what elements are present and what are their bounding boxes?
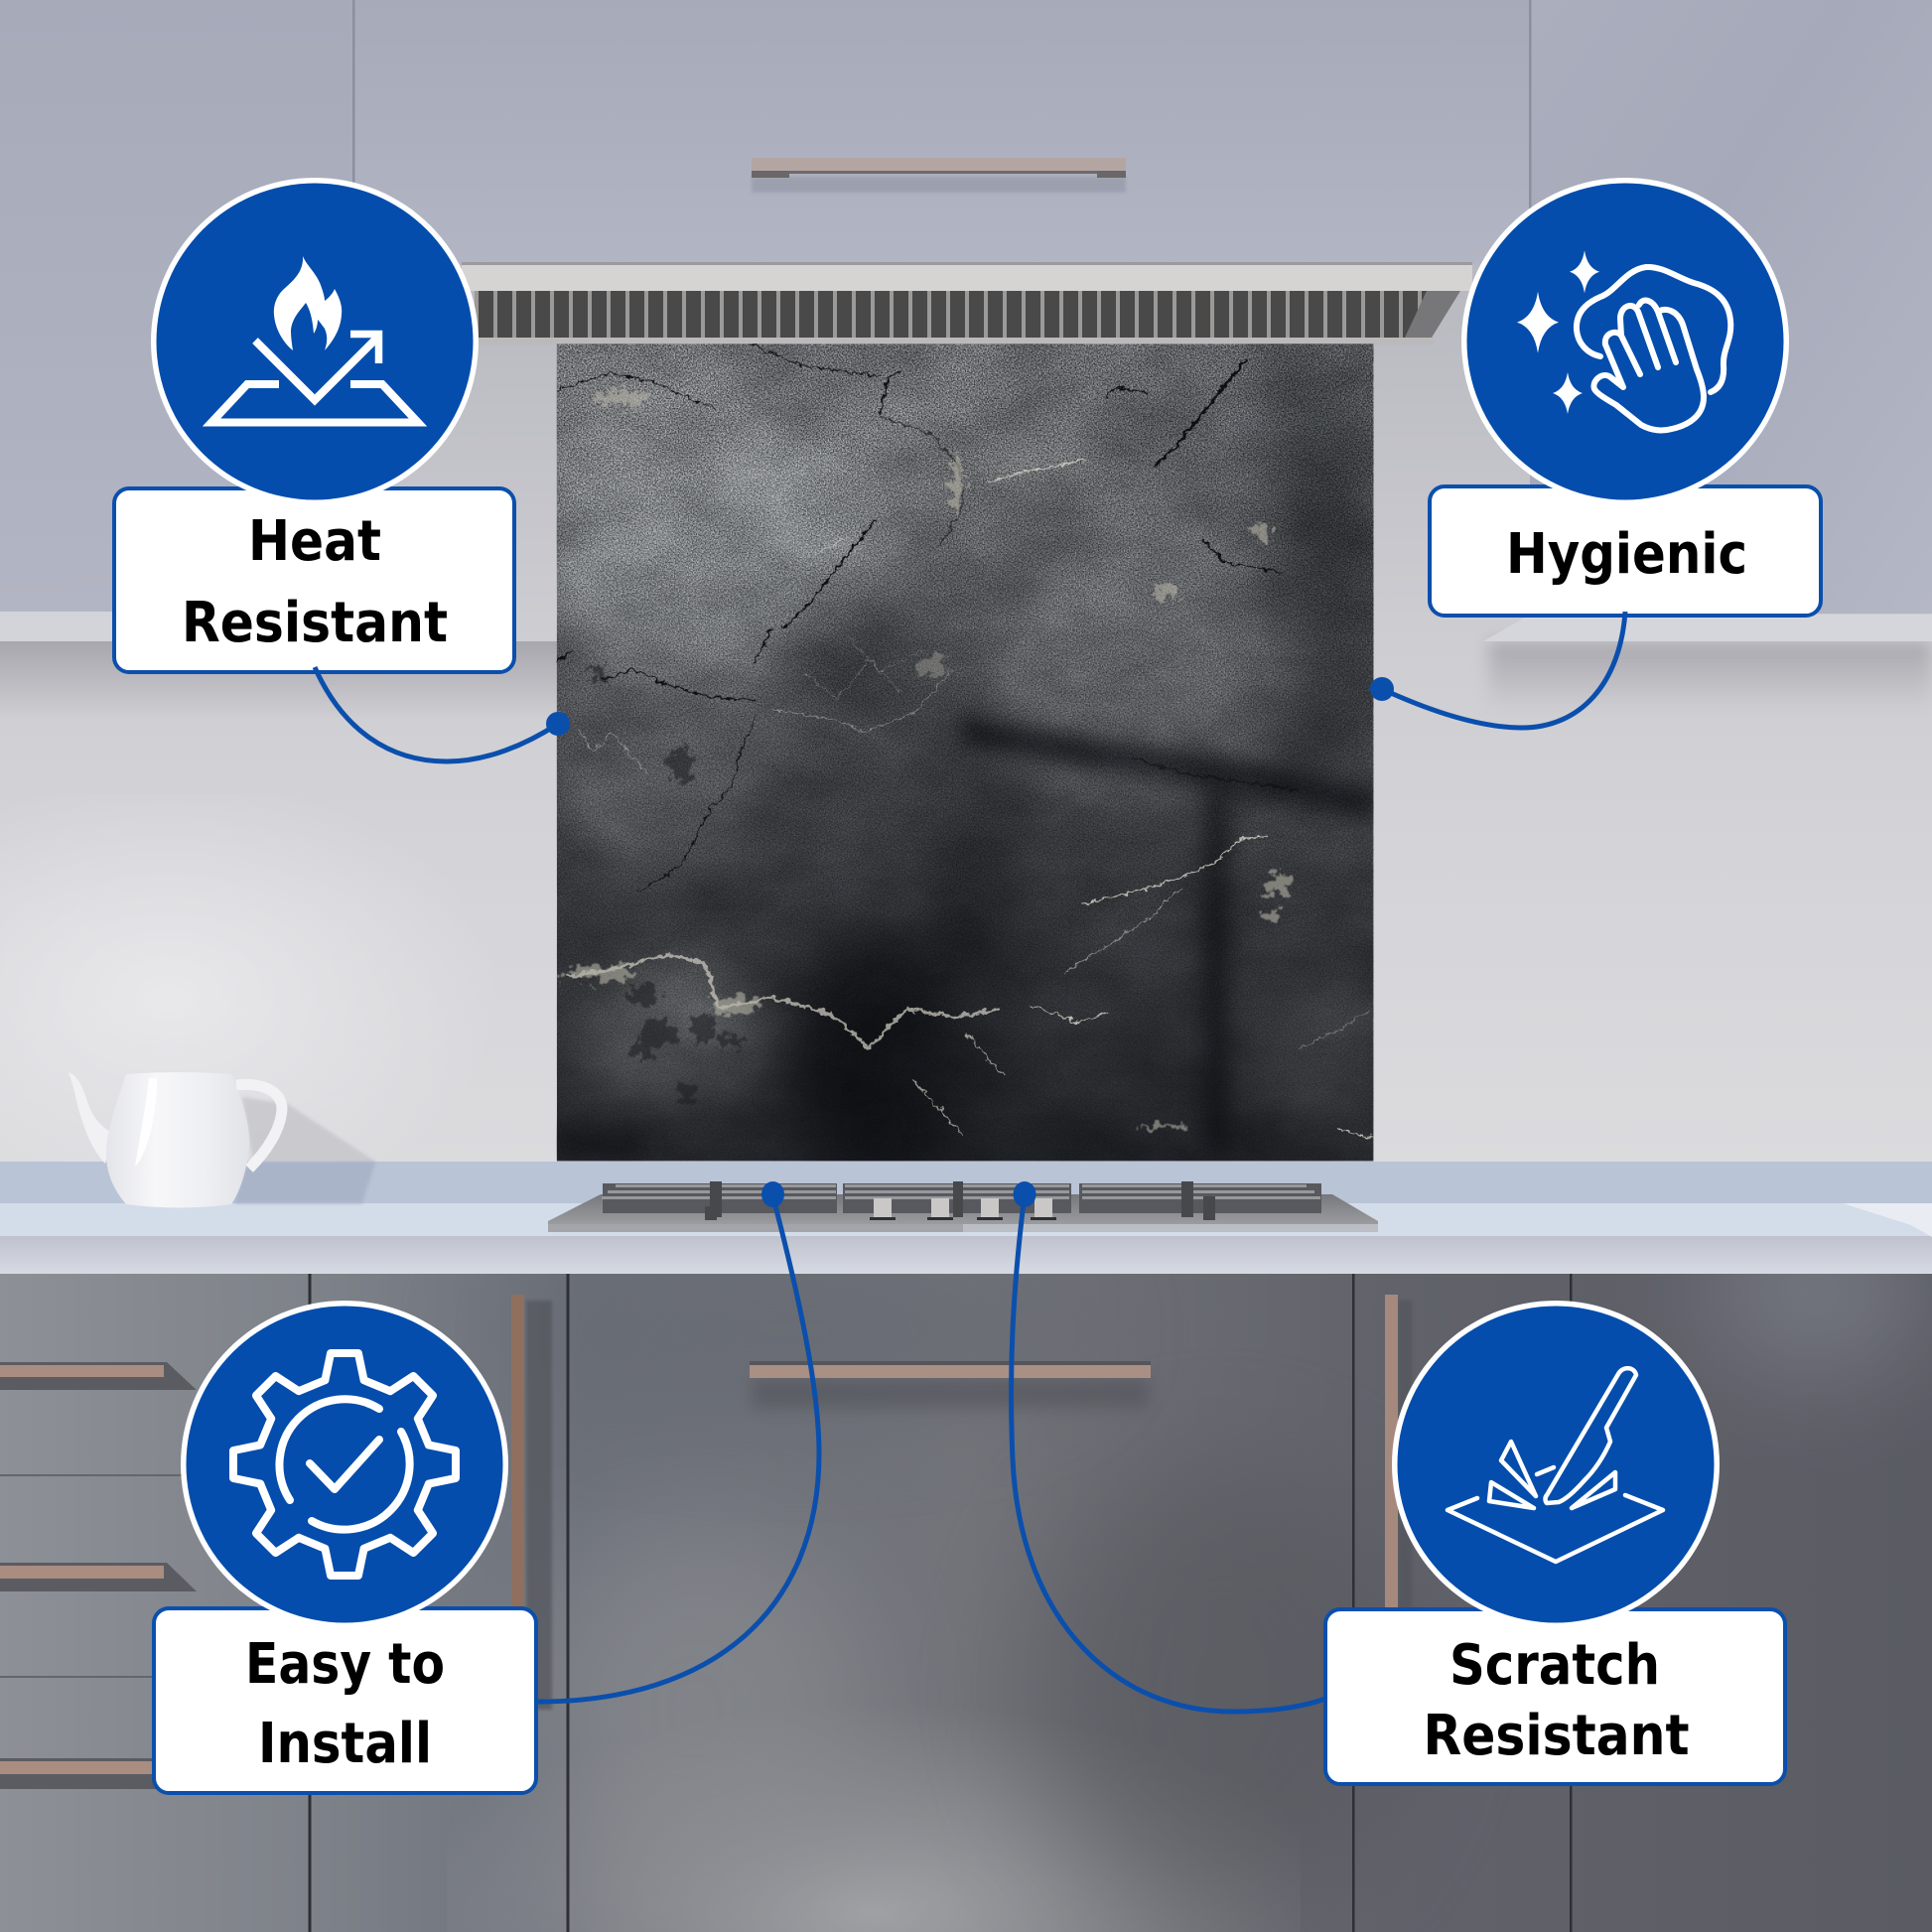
vertical handles bbox=[526, 1301, 552, 1710]
connector bbox=[538, 1194, 819, 1702]
label text: Resistant bbox=[182, 591, 448, 655]
extractor hood bbox=[462, 262, 1472, 345]
splashback panel bbox=[556, 344, 1374, 1162]
tonal clouds bbox=[556, 344, 1374, 1162]
cabinet seams bbox=[308, 1274, 312, 1932]
label box bbox=[1325, 1609, 1785, 1784]
connector bbox=[1382, 612, 1625, 728]
upper handle bbox=[752, 158, 1126, 193]
badge fill bbox=[1467, 183, 1783, 500]
pale mineral patches bbox=[562, 390, 1291, 1129]
anchor dot bbox=[761, 1181, 784, 1207]
wall highlight left bbox=[0, 794, 557, 1162]
left drawer handles bbox=[0, 1362, 197, 1390]
badge bbox=[181, 1301, 508, 1628]
icon: knife scratching surface bbox=[1448, 1368, 1663, 1562]
badge fill bbox=[1398, 1307, 1714, 1622]
cooktop bbox=[548, 1181, 1378, 1232]
label box bbox=[154, 1608, 536, 1793]
icon: gear with check bbox=[233, 1353, 456, 1576]
wall bbox=[0, 258, 1932, 1164]
cabinet bottom rails bbox=[0, 612, 1932, 721]
connector bbox=[315, 667, 558, 761]
callout: Easy to Install bbox=[154, 1181, 819, 1793]
shadow streaks bbox=[557, 729, 1375, 1161]
anchor dot bbox=[546, 712, 570, 736]
label text: Install bbox=[258, 1712, 432, 1776]
badge bbox=[151, 178, 479, 505]
callout: Heat Resistant bbox=[114, 178, 570, 761]
label text: Easy to bbox=[245, 1632, 445, 1697]
label text bbox=[245, 1632, 445, 1776]
badge bbox=[1392, 1301, 1720, 1628]
label box bbox=[1430, 486, 1821, 616]
label text: Resistant bbox=[1424, 1704, 1690, 1768]
burner knobs bbox=[874, 1198, 1052, 1218]
icon: hand wiping with sparkles bbox=[1517, 250, 1730, 430]
counter top bbox=[0, 1203, 1932, 1236]
dark cracks bbox=[557, 344, 1300, 893]
panel base bbox=[557, 344, 1373, 1161]
anchor dot bbox=[1370, 677, 1394, 701]
counter edge bbox=[0, 1236, 1932, 1274]
label text: Heat bbox=[248, 509, 381, 574]
connector bbox=[1011, 1194, 1325, 1712]
label text bbox=[1424, 1633, 1690, 1768]
stone grain bbox=[557, 344, 1373, 1161]
upper cabinets bbox=[0, 0, 1932, 614]
stone clouding bbox=[557, 344, 1373, 1161]
teapot bbox=[69, 1072, 375, 1207]
lower cabinets bbox=[0, 1211, 1932, 1932]
icon: flame over surface bbox=[211, 256, 418, 423]
counter back bbox=[0, 1162, 1932, 1203]
dark mottling bbox=[591, 663, 742, 1102]
centre handle bbox=[752, 1378, 1149, 1408]
badge fill bbox=[157, 183, 473, 500]
callout: Hygienic bbox=[1370, 178, 1821, 728]
counter corner item bbox=[1843, 1203, 1932, 1237]
callout: Scratch Resistant bbox=[1011, 1181, 1785, 1784]
label text: Hygienic bbox=[1506, 522, 1747, 587]
anchor dot bbox=[1013, 1181, 1036, 1207]
light veins bbox=[568, 460, 1373, 1138]
drawer seams bbox=[0, 1474, 181, 1476]
label text: Scratch bbox=[1449, 1633, 1660, 1698]
label text bbox=[182, 509, 448, 655]
badge bbox=[1461, 178, 1789, 505]
badge fill bbox=[187, 1307, 502, 1622]
burner grates bbox=[603, 1183, 1321, 1213]
label box bbox=[114, 488, 514, 672]
